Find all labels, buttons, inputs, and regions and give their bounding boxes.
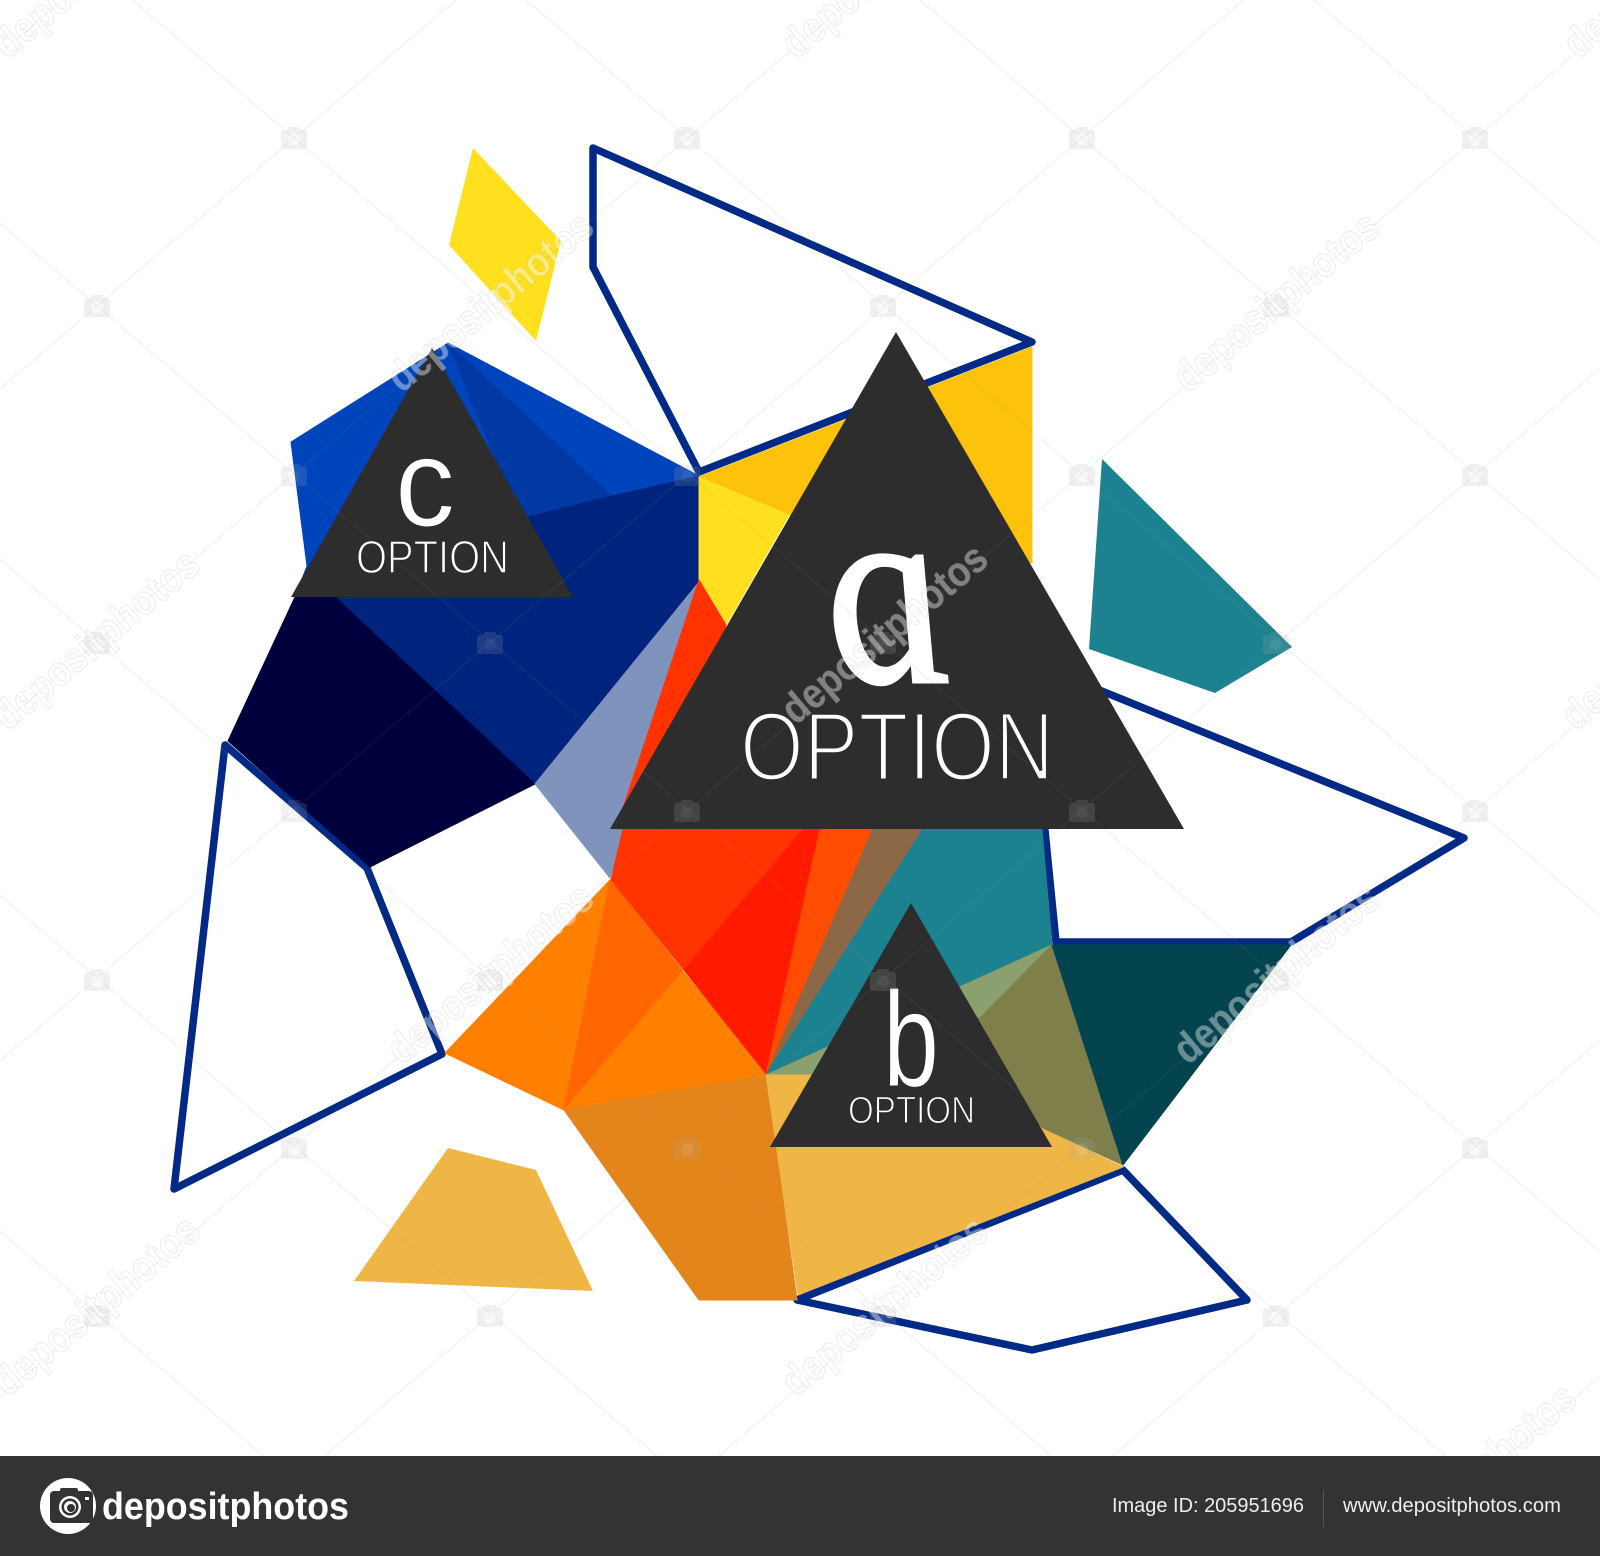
cluster: yellow facets (699, 347, 1032, 625)
outline: bottom white polygon (797, 1170, 1247, 1350)
watermark: repeated stock text: depositphotos (378, 202, 602, 401)
logo wordmark: depositphotos (102, 1486, 349, 1528)
outline: left white polygon (174, 745, 442, 1189)
watermark: repeated stock text: depositphotos (378, 874, 602, 1073)
image id: Image ID: 205951696 (1112, 1495, 1304, 1517)
footer bar (0, 1456, 1600, 1556)
cluster: blue facets (228, 343, 699, 878)
cluster: teal and olive facets (766, 829, 1291, 1295)
website: www.depositphotos.com (1342, 1495, 1561, 1517)
watermark: repeated stock text: depositphotos (1164, 202, 1388, 401)
label: option a: OPTION (740, 692, 1054, 801)
shape: teal floating polygon (1089, 459, 1292, 693)
watermark: repeated stock text: depositphotos (772, 534, 996, 733)
letter c: c (395, 414, 455, 553)
letter a: a (781, 441, 977, 741)
outline: right white polygon (1042, 670, 1464, 942)
letter b: b (883, 964, 939, 1115)
icon: camera logo (40, 1478, 96, 1534)
label: option c: OPTION (356, 531, 509, 583)
outline: top white polygon (593, 148, 1032, 472)
panel: option b (770, 903, 1052, 1147)
watermark: camera marks (84, 127, 1488, 1327)
watermark: repeated stock text: depositphotos (772, 1206, 996, 1405)
cluster: red and orange facets (445, 580, 923, 1300)
panel: option a (610, 332, 1184, 829)
label: option b: OPTION (848, 1090, 975, 1132)
shape: amber trapezoid (354, 1148, 593, 1291)
panel: option c (291, 348, 573, 597)
watermark: repeated stock text: depositphotos (1164, 874, 1388, 1073)
shape: yellow diamond (449, 148, 561, 341)
